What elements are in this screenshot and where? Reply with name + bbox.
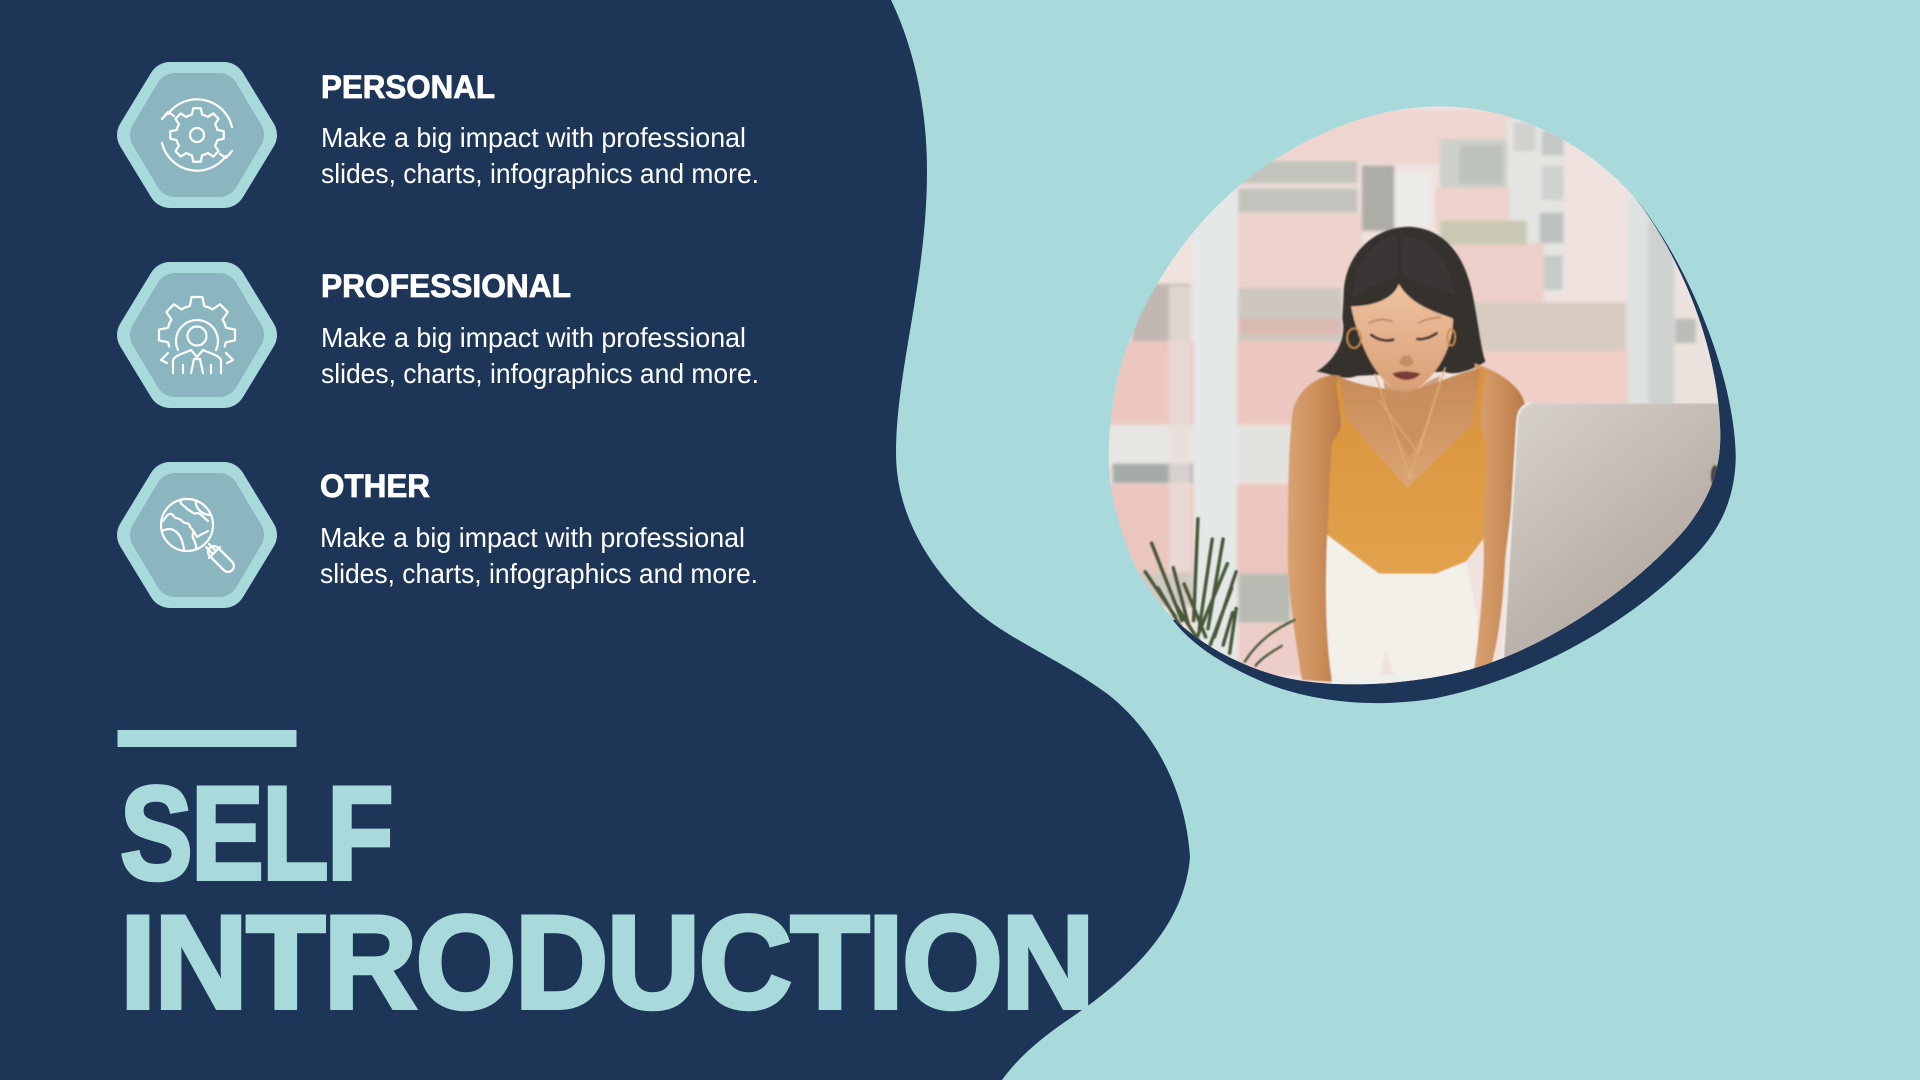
item: other: [139, 468, 758, 589]
text: personal description: slides, charts, infographics and more.: [321, 158, 759, 189]
title: INTRODUCTION: [120, 889, 1093, 1037]
icon: globe under magnifier hexagon: [139, 484, 255, 586]
heading: personal: PERSONAL: [321, 69, 495, 105]
heading: professional: PROFESSIONAL: [321, 268, 571, 304]
photo: woman at a computer: [1097, 98, 1731, 702]
accent bar: [118, 730, 296, 747]
text: professional description: [321, 322, 759, 389]
icon: professional in gear hexagon: [139, 284, 255, 386]
woman: [1316, 227, 1486, 378]
text: personal description: [321, 122, 759, 189]
monitor: [1503, 403, 1731, 666]
title: SELF: [120, 760, 392, 908]
heading: other: OTHER: [320, 468, 430, 504]
plant: [1145, 519, 1236, 653]
text: personal description: Make a big impact with professional: [321, 122, 746, 153]
icon: rotating gear hexagon: [139, 84, 255, 186]
text: professional description: slides, charts, infographics and more.: [321, 358, 759, 389]
navy blob shadow: [1173, 198, 1736, 703]
navy organic panel: [0, 0, 1190, 1080]
text: other description: slides, charts, infographics and more.: [320, 558, 758, 589]
text: professional description: Make a big impact with professional: [321, 322, 746, 353]
text: other description: [320, 522, 758, 589]
text: other description: Make a big impact with professional: [320, 522, 745, 553]
photo blob: [1097, 98, 1736, 703]
title: [120, 760, 1093, 1037]
item: professional: [139, 268, 759, 389]
item: personal: [139, 69, 759, 189]
